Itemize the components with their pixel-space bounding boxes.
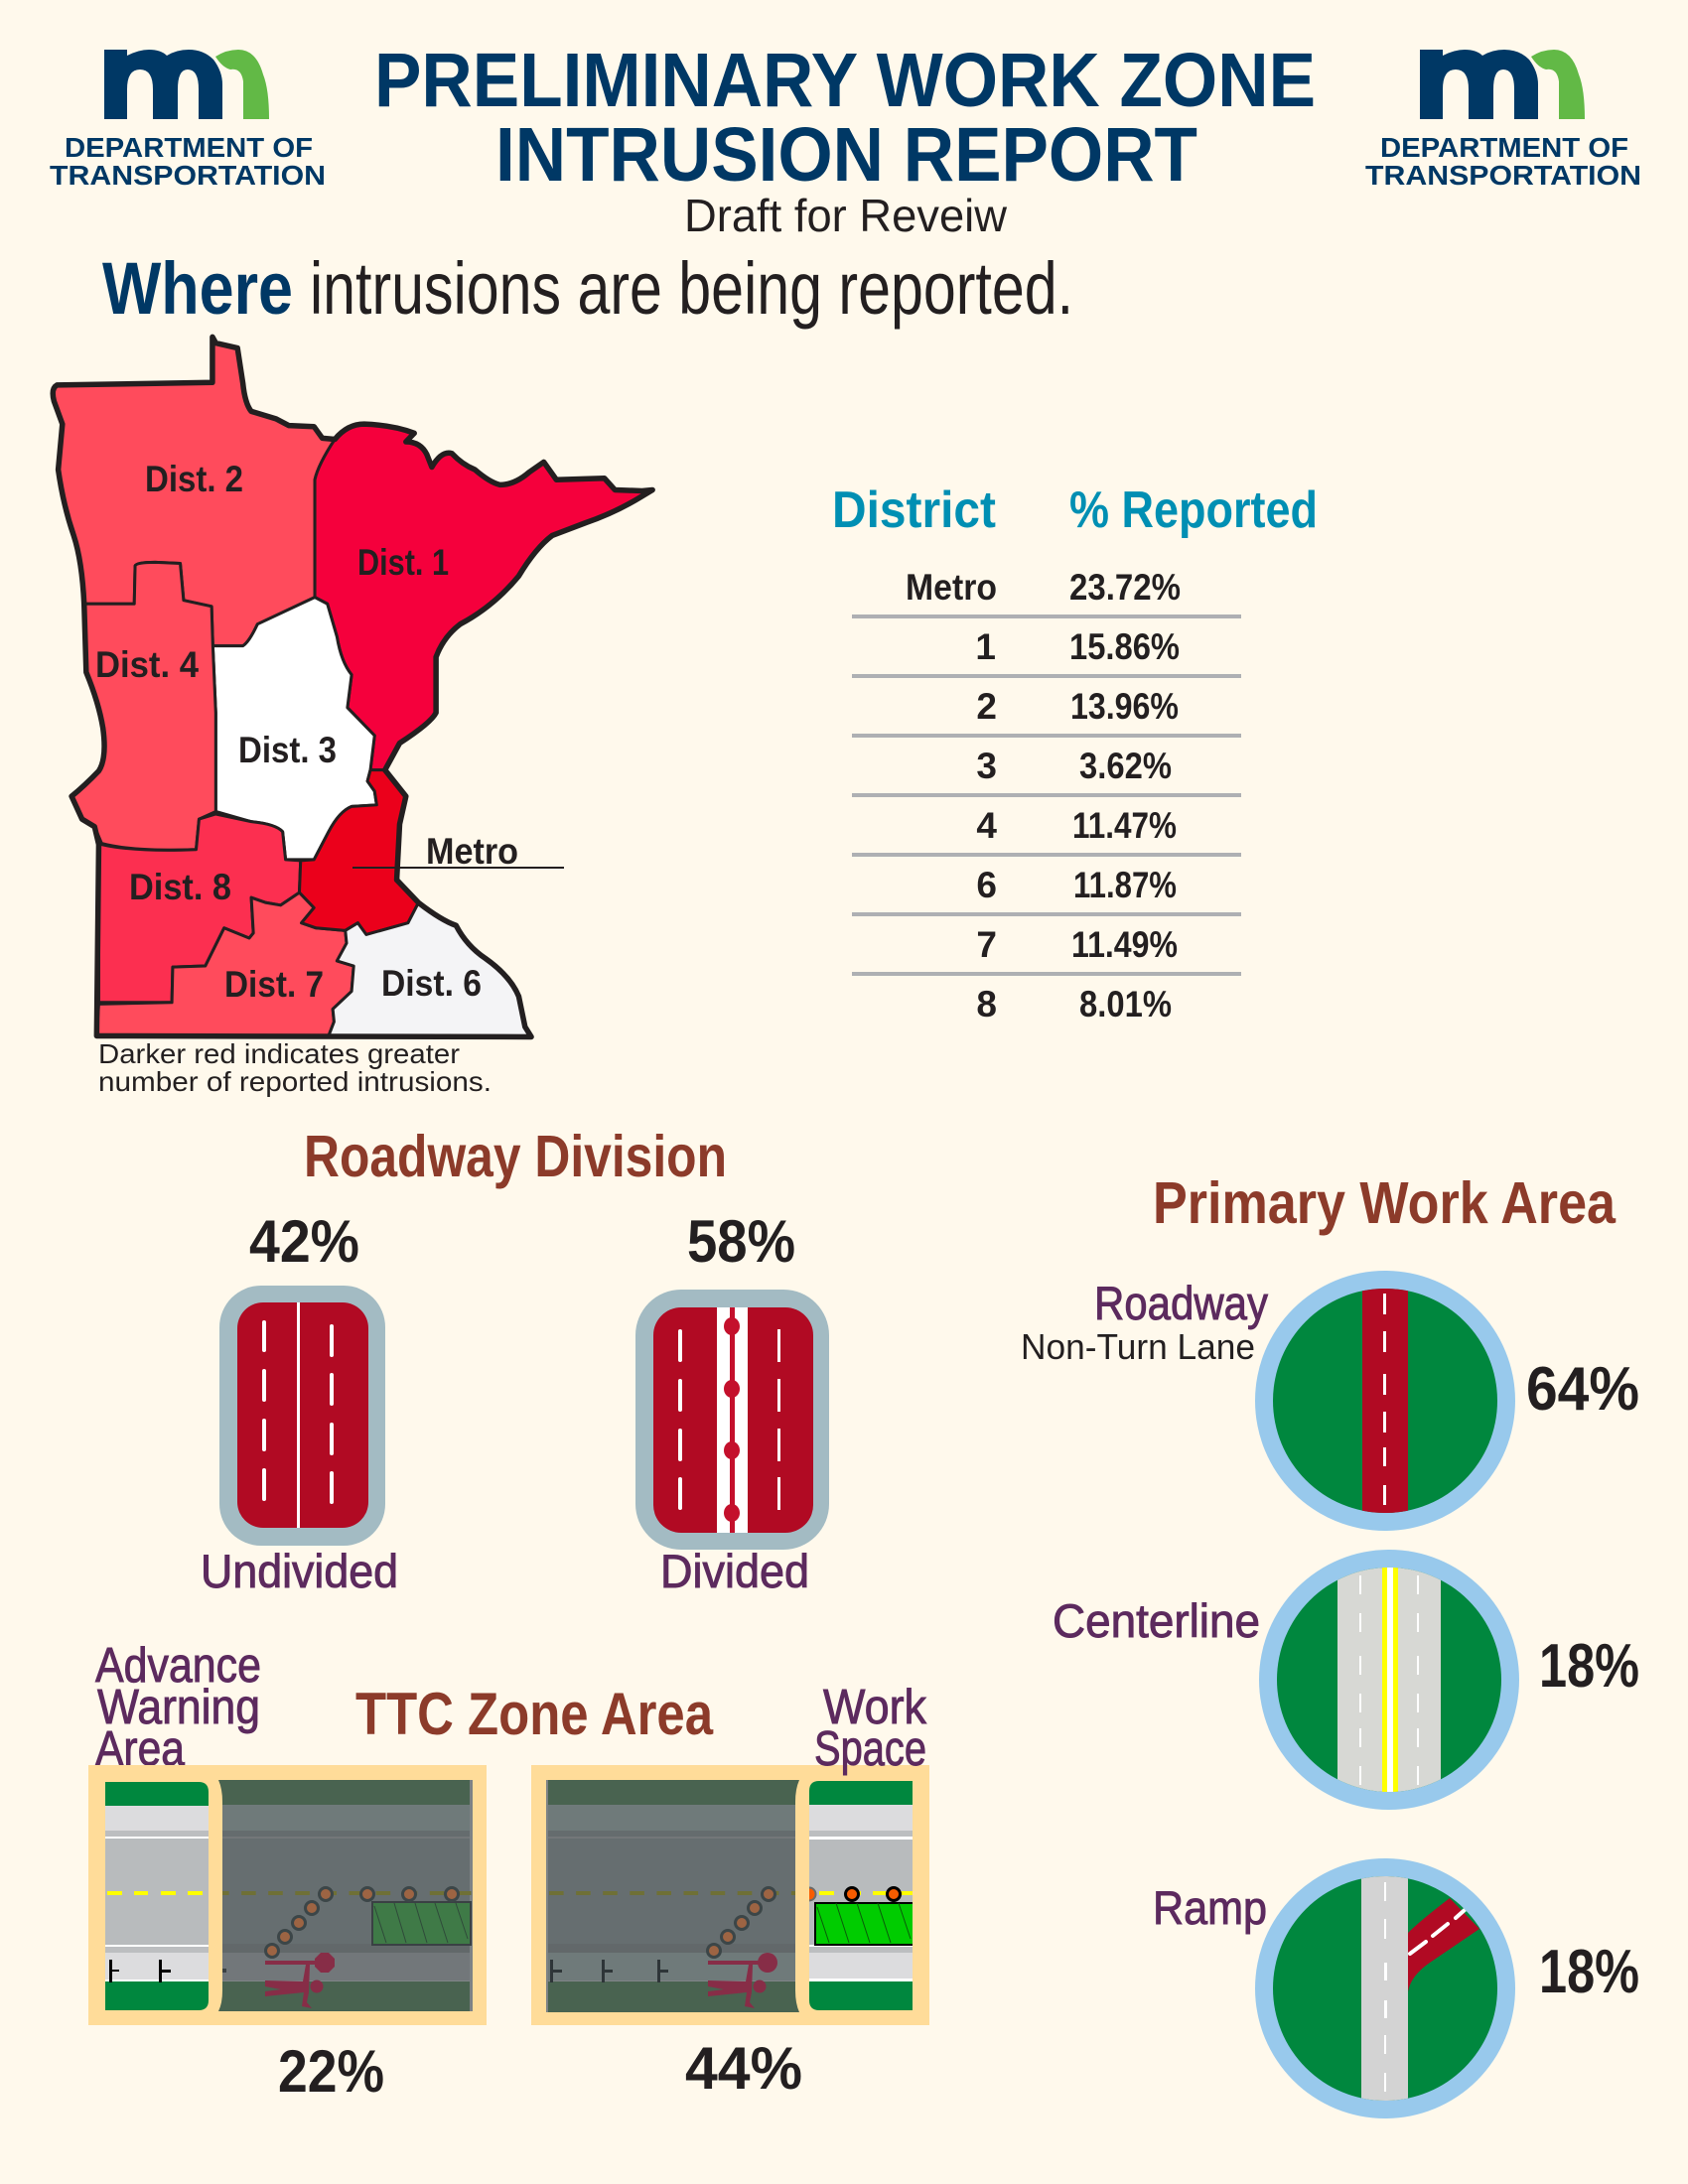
map labels: Metro [426, 831, 518, 872]
map labels: Dist. 7 [224, 964, 324, 1005]
cones [707, 1888, 774, 1958]
label: ramp: Ramp [1153, 1881, 1267, 1934]
label: roadway: Roadway [1094, 1277, 1268, 1329]
title: PRELIMINARY WORK ZONE [374, 38, 1316, 123]
work area box [815, 1903, 914, 1945]
district column: Metro [906, 567, 997, 608]
district column: 6 [976, 865, 997, 905]
label: divided: Divided [660, 1545, 809, 1597]
logo mark: mn [104, 50, 269, 119]
stat: undivided 42%: 42% [249, 1208, 359, 1275]
district metro [299, 770, 418, 934]
map labels: Dist. 4 [95, 644, 199, 685]
table header [832, 481, 1318, 539]
map labels: Dist. 8 [129, 867, 231, 907]
map labels: Dist. 3 [238, 730, 337, 770]
percent column: 11.47% [1072, 805, 1177, 846]
flagger icon [708, 1953, 777, 2008]
panel: work space diagram [531, 1765, 929, 2025]
icon: undivided road [219, 1286, 385, 1546]
stat: work space 44%: 44% [685, 2035, 802, 2102]
highlighted road inset [802, 1781, 914, 2010]
label: advance warning area: Warning [97, 1681, 260, 1734]
metro leader line [352, 867, 564, 869]
map note: Darker red indicates greater [98, 1038, 460, 1069]
icon: ramp circle [1255, 1858, 1515, 2118]
logo: left MnDOT [50, 50, 326, 191]
district 2 [53, 337, 335, 646]
percent column: 8.01% [1079, 984, 1172, 1024]
district column: 3 [976, 746, 997, 786]
icon: divided road [635, 1290, 829, 1550]
percent column: 23.72% [1069, 567, 1181, 608]
panel: advance warning area diagram [88, 1765, 487, 2025]
logo mark: mn [1420, 50, 1585, 119]
section heading: where [102, 247, 1073, 330]
highlighted road inset [105, 1782, 209, 2010]
dimmed road [214, 1780, 473, 2011]
logo text: DEPARTMENT OF [1380, 132, 1628, 163]
section heading: where: Where [102, 247, 293, 330]
label: centerline: Centerline [1053, 1594, 1260, 1647]
logo text: DEPARTMENT OF [65, 132, 313, 163]
section heading: where: intrusions are being reported. [310, 247, 1073, 330]
logo text [1365, 132, 1641, 191]
map labels [95, 459, 518, 1005]
label: undivided: Undivided [201, 1545, 398, 1597]
district column: 2 [976, 686, 997, 727]
table rules [852, 614, 1241, 976]
title [374, 38, 1316, 198]
percent column: 11.87% [1073, 865, 1177, 905]
stat: centerline 18%: 18% [1539, 1632, 1639, 1701]
map labels: Dist. 6 [381, 963, 482, 1004]
dimmed road [546, 1780, 799, 2012]
map labels: Dist. 1 [357, 542, 449, 583]
stat: advance warning 22%: 22% [278, 2038, 384, 2105]
state outline [53, 337, 652, 1036]
work area box [372, 1902, 471, 1945]
logo: right MnDOT [1365, 50, 1641, 191]
flagger icon [265, 1953, 335, 2008]
table header: District [832, 481, 996, 539]
district column: 8 [976, 984, 997, 1024]
label: advance warning area [95, 1639, 261, 1776]
district 1 [315, 424, 652, 770]
map labels: Dist. 2 [145, 459, 243, 499]
label: work space: Work [823, 1681, 926, 1734]
map note [98, 1038, 492, 1097]
table: percent reported by district [832, 481, 1318, 1024]
icon: roadway circle [1255, 1271, 1515, 1531]
district column: 1 [975, 626, 996, 667]
label: work space [814, 1681, 926, 1776]
district 3 [212, 598, 376, 860]
stat: divided 58%: 58% [687, 1208, 795, 1275]
map note: number of reported intrusions. [98, 1066, 492, 1097]
percent column [1069, 567, 1181, 1024]
district 4 [71, 562, 215, 850]
label: non-turn lane: Non-Turn Lane [1021, 1326, 1255, 1367]
map: Minnesota districts [53, 337, 652, 1036]
stat: ramp 18%: 18% [1539, 1938, 1639, 2006]
label: advance warning area: Area [95, 1722, 186, 1776]
district 6 [329, 902, 531, 1036]
subtitle: Draft for Reveiw [684, 190, 1008, 241]
label: advance warning area: Advance [95, 1639, 261, 1693]
logo text: TRANSPORTATION [50, 160, 326, 191]
table header: % Reported [1069, 481, 1318, 539]
percent column: 11.49% [1071, 924, 1178, 965]
heading: TTC zone area: TTC Zone Area [355, 1681, 714, 1747]
cones [266, 1888, 459, 1958]
icon: centerline circle [1259, 1550, 1519, 1810]
logo text: TRANSPORTATION [1365, 160, 1641, 191]
heading: roadway division: Roadway Division [304, 1124, 727, 1189]
label: work space: Space [814, 1722, 926, 1776]
percent column: 15.86% [1069, 626, 1180, 667]
percent column: 13.96% [1070, 686, 1179, 727]
district 8 [98, 814, 301, 1003]
district column: 4 [976, 805, 997, 846]
stat: roadway 64%: 64% [1526, 1355, 1639, 1424]
heading: primary work area: Primary Work Area [1153, 1170, 1617, 1236]
district column [906, 567, 997, 1024]
percent column: 3.62% [1079, 746, 1172, 786]
title: INTRUSION REPORT [495, 112, 1197, 198]
district 7 [96, 892, 353, 1035]
district column: 7 [976, 924, 997, 965]
logo text [50, 132, 326, 191]
